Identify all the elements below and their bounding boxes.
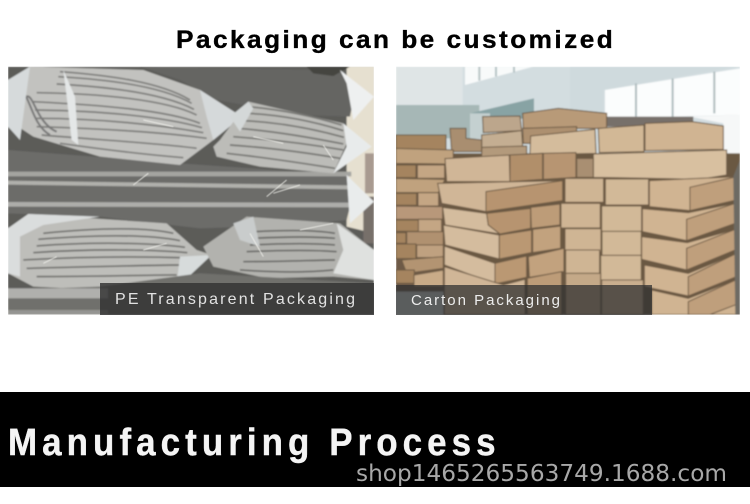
section banner: [0, 392, 750, 487]
watermark: shop URL: shop1465265563749.1688.com: [356, 461, 727, 487]
caption: PE Transparent Packaging: [100, 283, 374, 315]
title: Packaging can be customized: [176, 27, 613, 54]
panel: PE transparent packaging photo: [8, 67, 374, 315]
panel: carton packaging photo: [396, 67, 740, 315]
heading: Manufacturing Process: Manufacturing Process: [8, 421, 496, 463]
caption: Carton Packaging: [396, 285, 652, 315]
caption: PE Transparent Packaging: PE Transparent Packaging: [115, 291, 355, 308]
caption: Carton Packaging: Carton Packaging: [411, 292, 560, 309]
